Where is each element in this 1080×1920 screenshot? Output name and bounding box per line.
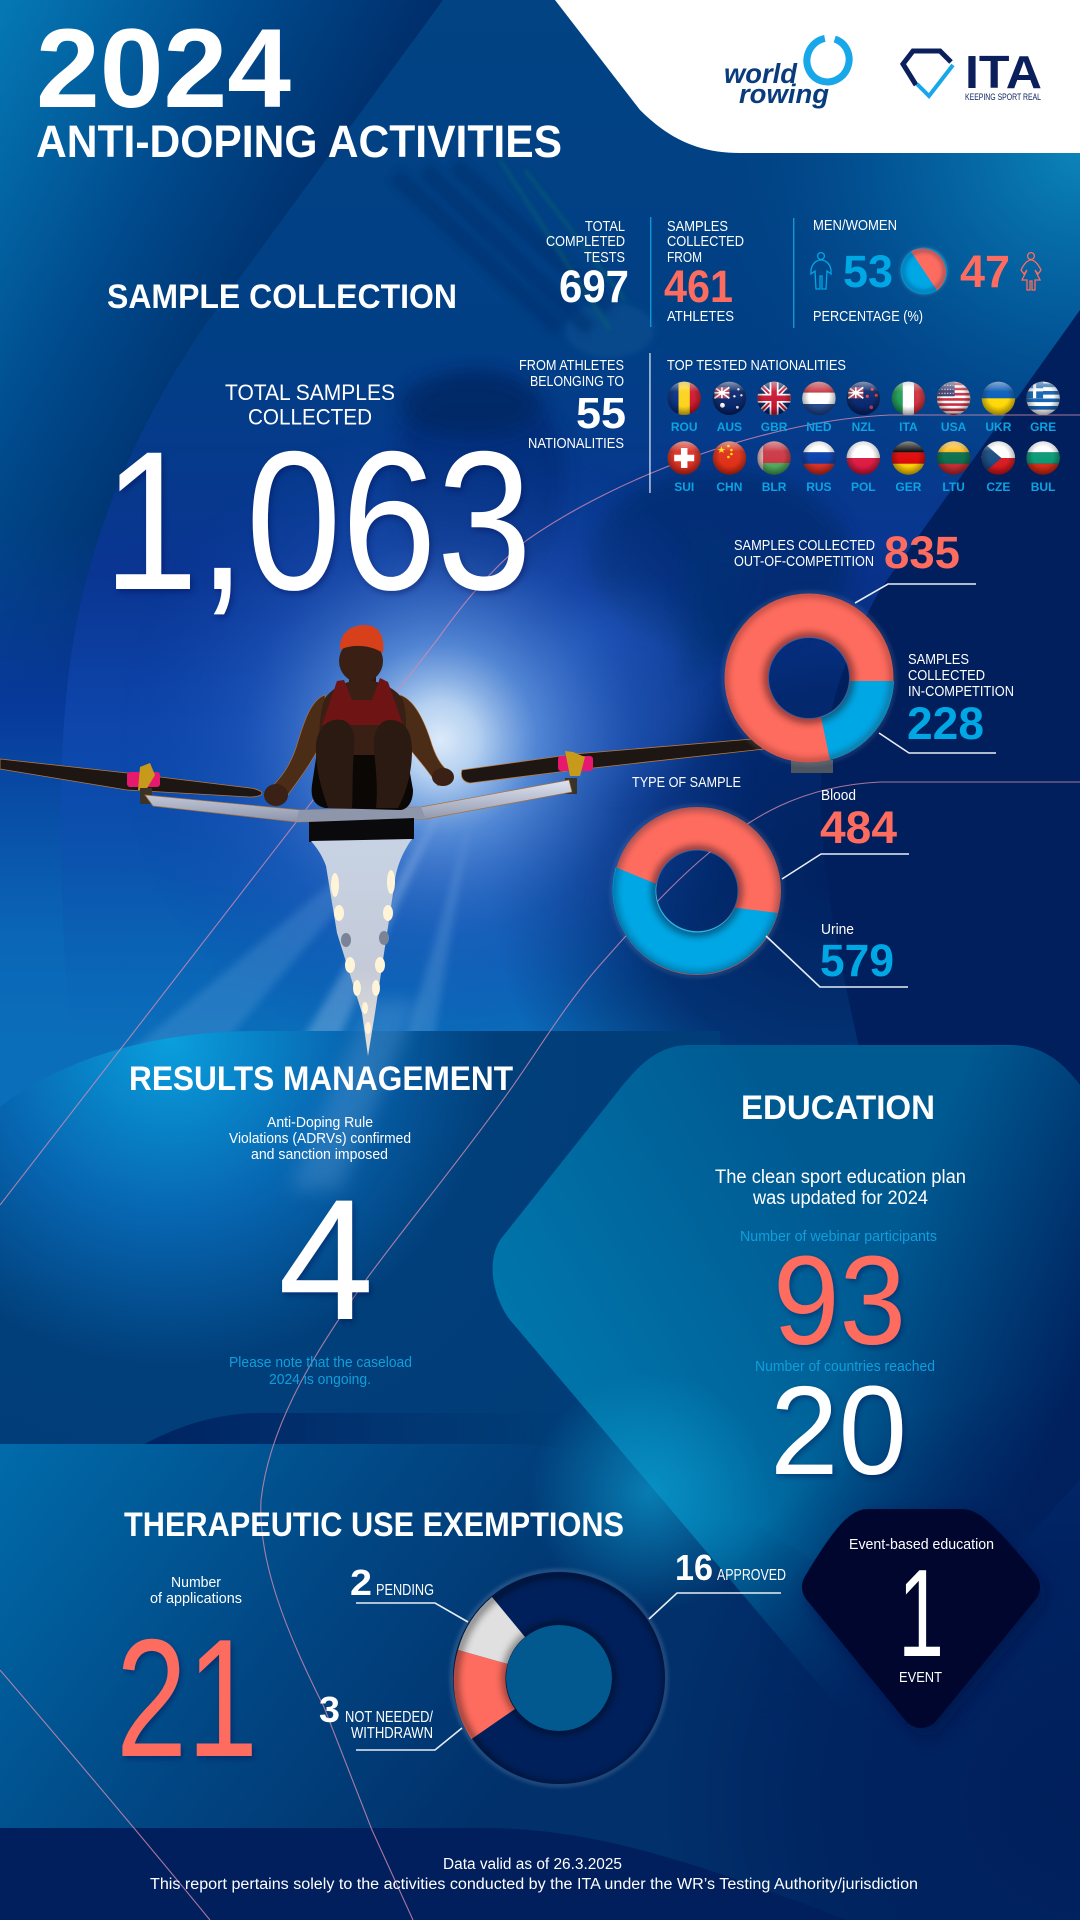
flag: UKR: UKR: [985, 420, 1012, 434]
hull: [311, 839, 412, 1056]
icon: man: [811, 253, 831, 289]
callout: urine: 579: [820, 935, 894, 986]
results panel shape: [0, 1031, 720, 1500]
chart: TUE donut: [452, 1571, 667, 1786]
callout: out-of-competition: OUT-OF-COMPETITION: [734, 553, 874, 570]
footer note: Data valid as of 26.3.2025: [443, 1856, 622, 1873]
white logo panel: [555, 0, 1080, 153]
stat: webinar participants: 93: [773, 1230, 906, 1371]
callout: pending: 2: [350, 1562, 372, 1603]
flag: NED: [802, 381, 836, 434]
flag: AUS: [712, 381, 746, 434]
flag: SUI: [667, 441, 701, 494]
right oar: [461, 735, 800, 783]
panel: therapeutic use exemptions: [116, 1506, 786, 1792]
education panel shape: [492, 1045, 1080, 1660]
flag: ITA: [891, 381, 925, 434]
callout: blood: Blood: [821, 787, 856, 804]
stat: samples collected from athletes: SAMPLES: [667, 218, 728, 235]
callout: not needed withdrawn: [319, 1689, 462, 1750]
seat box: [309, 818, 414, 842]
pie chart: men women: [900, 247, 948, 295]
heading: sample collection: SAMPLE COLLECTION: [107, 278, 457, 316]
panel: event-based education: [822, 1529, 1026, 1716]
note: [229, 1354, 412, 1388]
stat: samples collected from athletes: 461: [664, 261, 733, 312]
description: Anti-Doping Rule: [267, 1115, 373, 1131]
description: and sanction imposed: [251, 1147, 388, 1163]
flag: GBR: [757, 381, 791, 434]
total samples collected: COLLECTED: [248, 404, 372, 430]
logo: world rowing: rowing: [739, 79, 830, 109]
stat: men and women percentage: PERCENTAGE (%): [813, 308, 923, 325]
stat: countries reached: 20: [770, 1360, 907, 1501]
logo: ITA: KEEPING SPORT REAL: [965, 92, 1041, 103]
flag: AUS: AUS: [717, 420, 742, 434]
stat: total completed tests: TESTS: [584, 249, 625, 266]
description: was updated for 2024: [752, 1188, 928, 1209]
total samples collected: TOTAL SAMPLES: [225, 380, 395, 405]
note: Please note that the caseload: [229, 1354, 412, 1371]
flag: GER: [891, 441, 925, 494]
stat: nationalities count: FROM ATHLETES: [519, 357, 624, 374]
flag: BLR: BLR: [762, 480, 787, 494]
flag: GRE: GRE: [1030, 420, 1056, 434]
callout: approved: APPROVED: [717, 1567, 786, 1584]
description: [715, 1167, 966, 1209]
flag: BLR: [757, 441, 791, 494]
flag: USA: USA: [941, 420, 967, 434]
note: 2024 is ongoing.: [269, 1371, 371, 1388]
footer note: [150, 1856, 918, 1893]
flag: ROU: ROU: [671, 420, 698, 434]
stat: men and women percentage: [811, 217, 1041, 325]
lower right backdrop: [660, 1480, 1080, 1920]
applications count: 21: [116, 1604, 258, 1792]
flag: UKR: [981, 381, 1015, 434]
stat: total completed tests: TOTAL: [585, 218, 625, 235]
stat: total completed tests: COMPLETED: [546, 233, 625, 250]
callout: out-of-competition: 835: [884, 527, 960, 578]
applications count: Number: [171, 1574, 221, 1591]
footer band shape: [0, 1828, 847, 1920]
stat: samples collected from athletes: COLLECTED: [667, 233, 744, 250]
logo: ITA: [903, 46, 1042, 103]
callout: not needed withdrawn: NOT NEEDED/: [345, 1709, 434, 1726]
flag: GBR: GBR: [761, 420, 788, 434]
flag: CHN: CHN: [716, 480, 742, 494]
heading: EDUCATION: [741, 1089, 935, 1127]
callout: in-competition: [879, 651, 1014, 753]
flag: POL: POL: [851, 480, 876, 494]
stat: men and women percentage: 47: [960, 246, 1010, 297]
title: ANTI-DOPING ACTIVITIES: [36, 116, 562, 167]
stat: webinar participants: Number of webinar participants: [740, 1228, 937, 1245]
chart: sample type donut: [612, 806, 782, 976]
flag: ROU: [667, 381, 701, 434]
callout: in-competition: IN-COMPETITION: [908, 683, 1014, 700]
therapeutic dark leaf: [0, 1413, 720, 1560]
stat: samples collected from athletes: ATHLETES: [667, 308, 734, 325]
flag: SUI: SUI: [674, 480, 694, 494]
applications count: of applications: [150, 1590, 242, 1607]
stat: men and women percentage: MEN/WOMEN: [813, 217, 897, 234]
top tested nationalities: [667, 357, 1060, 494]
icon: woman: [1021, 253, 1041, 290]
callout: blood: 484: [820, 802, 897, 853]
description: [229, 1115, 411, 1163]
callout: approved: 16: [675, 1547, 713, 1588]
applications count: [116, 1574, 258, 1792]
flag: RUS: [802, 441, 836, 494]
number: 4: [278, 1164, 374, 1356]
flag: LTU: LTU: [942, 480, 965, 494]
stat: nationalities count: 55: [576, 389, 626, 438]
flag: BUL: [1026, 441, 1060, 494]
flag: NZL: [846, 381, 880, 434]
left collar: [127, 763, 160, 804]
logo: world rowing: [724, 32, 855, 109]
athlete: [264, 625, 454, 810]
panel: event-based education: EVENT: [899, 1669, 942, 1686]
flag: BUL: BUL: [1031, 480, 1055, 494]
callout: blood: [782, 787, 909, 879]
stat: men and women percentage: 53: [843, 246, 893, 297]
callout: approved: [649, 1547, 786, 1619]
title: [36, 6, 562, 167]
heading: THERAPEUTIC USE EXEMPTIONS: [124, 1506, 624, 1544]
flag: POL: [846, 441, 880, 494]
light rays: [120, 800, 470, 1060]
callout: out-of-competition: [734, 527, 976, 603]
stat: total completed tests: 697: [559, 261, 629, 312]
panel: education: [715, 1089, 966, 1501]
panel: event-based education: Event-based education: [849, 1536, 994, 1553]
rower photo cut-out: [0, 625, 800, 1056]
stat: nationalities count: NATIONALITIES: [528, 435, 624, 452]
flag: RUS: RUS: [806, 480, 832, 494]
heading: RESULTS MANAGEMENT: [129, 1060, 513, 1098]
description: The clean sport education plan: [715, 1167, 966, 1188]
stat: nationalities count: [519, 357, 626, 452]
flag: ITA: ITA: [899, 420, 918, 434]
callout: not needed withdrawn: WITHDRAWN: [351, 1725, 433, 1742]
title: 2024: [36, 6, 291, 131]
flag: GRE: [1026, 381, 1060, 434]
stat: countries reached: Number of countries reached: [755, 1358, 935, 1375]
flag: USA: [937, 381, 971, 434]
callout: urine: Urine: [821, 921, 854, 938]
callout: urine: [766, 921, 908, 987]
callout: in-competition: COLLECTED: [908, 667, 985, 684]
therapeutic panel shape: [0, 1444, 1080, 1920]
callout: in-competition: SAMPLES: [908, 651, 969, 668]
stat: samples collected from athletes: FROM: [667, 249, 702, 266]
callout: not needed withdrawn: 3: [319, 1689, 340, 1730]
flag: LTU: [937, 441, 971, 494]
chart: competition donut: [724, 592, 894, 773]
callout: out-of-competition: SAMPLES COLLECTED: [734, 537, 875, 554]
logo: ITA: ITA: [965, 46, 1042, 98]
pink curve lines: [0, 415, 1080, 1920]
right collar: [558, 751, 593, 794]
ghost athlete photo: [395, 160, 850, 780]
flag: CZE: [981, 441, 1015, 494]
label: type of sample: TYPE OF SAMPLE: [632, 774, 741, 791]
footer note: This report pertains solely to the activities conducted by the ITA under the WR’s Testing Authority/jurisdiction: [150, 1876, 918, 1893]
callout: pending: PENDING: [376, 1582, 434, 1599]
description: Violations (ADRVs) confirmed: [229, 1131, 411, 1147]
stat: total completed tests: [546, 218, 629, 312]
stat: nationalities count: BELONGING TO: [530, 373, 624, 390]
riggers and platform: [145, 780, 572, 822]
flag: CZE: CZE: [986, 480, 1010, 494]
flag: NED: NED: [806, 420, 832, 434]
callout: pending: [350, 1562, 468, 1622]
panel: results management: [129, 1060, 513, 1388]
total samples collected: 1,063: [103, 410, 532, 631]
flag: CHN: [712, 441, 746, 494]
flag: NZL: NZL: [852, 420, 875, 434]
panel: event-based education: 1: [898, 1545, 944, 1683]
stat: samples collected from athletes: [664, 218, 744, 325]
flag: GER: GER: [895, 480, 922, 494]
left oar: [0, 759, 262, 797]
callout: in-competition: 228: [907, 698, 984, 749]
logo: world rowing: world: [724, 58, 798, 89]
top tested nationalities: TOP TESTED NATIONALITIES: [667, 357, 846, 374]
